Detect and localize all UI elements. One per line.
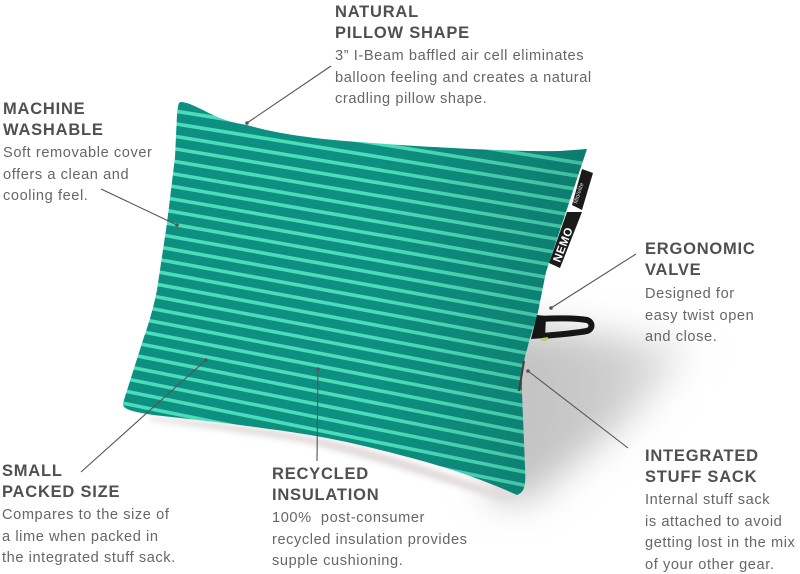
callout: natural pillow shape — [335, 3, 592, 107]
callout: integrated stuff sack: STUFF SACK — [645, 468, 757, 486]
callout: natural pillow shape: cradling pillow shape. — [335, 91, 487, 107]
callout: natural pillow shape: 3” I-Beam baffled air cell eliminates — [335, 48, 584, 64]
callout: integrated stuff sack: of your other gear. — [645, 557, 774, 573]
callout: small packed size: PACKED SIZE — [2, 483, 120, 501]
side seam — [518, 361, 525, 391]
callout: recycled insulation: supple cushioning. — [272, 553, 403, 569]
callout: natural pillow shape: PILLOW SHAPE — [335, 24, 470, 42]
NEMO tag: fillo/elite — [573, 182, 586, 205]
callout: small packed size: a lime when packed in — [2, 529, 159, 545]
callout: machine washable — [3, 100, 152, 204]
callout: integrated stuff sack: INTEGRATED — [645, 447, 759, 465]
callout: recycled insulation: RECYCLED — [272, 465, 369, 483]
callout: natural pillow shape: balloon feeling and creates a natural — [335, 70, 592, 86]
callout: machine washable: cooling feel. — [3, 188, 88, 204]
callout: ergonomic valve: ERGONOMIC — [645, 240, 756, 258]
callout: recycled insulation: 100% post-consumer — [272, 510, 425, 526]
callout: recycled insulation: INSULATION — [272, 486, 379, 504]
callout: ergonomic valve: easy twist open — [645, 308, 754, 324]
callout: small packed size: the integrated stuff sack. — [2, 550, 176, 566]
pillow body with stripes — [122, 102, 587, 495]
callout: machine washable: Soft removable cover — [3, 145, 152, 161]
NEMO tag — [549, 169, 593, 268]
pillow illustration — [80, 66, 686, 517]
callout: integrated stuff sack: Internal stuff sack — [645, 492, 770, 508]
callout: recycled insulation — [272, 465, 468, 569]
callout: ergonomic valve: VALVE — [645, 261, 701, 279]
callout: integrated stuff sack — [645, 447, 795, 573]
valve loop — [531, 315, 592, 341]
callout: small packed size: SMALL — [2, 462, 63, 480]
callout: ergonomic valve: and close. — [645, 329, 717, 345]
callout: recycled insulation: recycled insulation provides — [272, 532, 468, 548]
callout: integrated stuff sack: is attached to avoid — [645, 514, 782, 530]
callout: machine washable: MACHINE — [3, 100, 85, 118]
leader lines — [81, 66, 636, 472]
callout: natural pillow shape: NATURAL — [335, 3, 419, 21]
callout: ergonomic valve: Designed for — [645, 286, 735, 302]
cast shadow — [150, 322, 695, 501]
NEMO tag: NEMO — [552, 226, 576, 264]
callout: small packed size — [2, 462, 176, 566]
callout: machine washable: offers a clean and — [3, 167, 129, 183]
callout: machine washable: WASHABLE — [3, 121, 104, 139]
callout: integrated stuff sack: getting lost in the mix — [645, 535, 795, 551]
callout: small packed size: Compares to the size of — [2, 507, 169, 523]
callout: ergonomic valve — [645, 240, 756, 345]
